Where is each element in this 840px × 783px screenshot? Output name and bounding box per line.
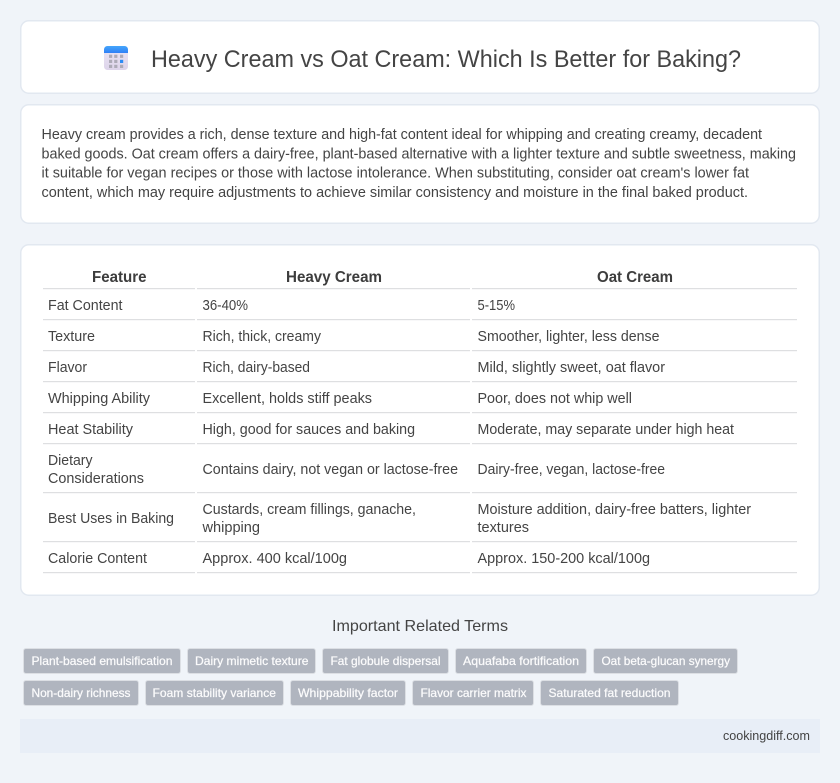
tag — [594, 648, 738, 674]
row: dietary considerations: Considerations — [48, 471, 144, 487]
tag — [540, 680, 678, 706]
row: calorie content — [48, 551, 650, 567]
row: texture — [48, 329, 660, 345]
intro text block: Heavy cream provides a rich, dense texture and high-fat content ideal for whipping and creating creamy, decadent — [42, 127, 762, 143]
row: dietary considerations: Dietary — [48, 453, 93, 469]
tag: Saturated fat reduction — [548, 686, 670, 700]
row: flavor: Mild, slightly sweet, oat flavor — [478, 360, 665, 376]
row: calorie content: Approx. 400 kcal/100g — [202, 551, 347, 567]
row: flavor: Rich, dairy-based — [202, 360, 310, 376]
tag — [188, 648, 316, 674]
row: dietary considerations — [48, 453, 665, 487]
panel: introduction — [21, 105, 819, 223]
tag: Plant-based emulsification — [32, 654, 172, 668]
footer site name: cookingdiff.com — [723, 729, 810, 743]
row: fat content: 36-40% — [202, 298, 248, 314]
tag — [290, 680, 406, 706]
table header row: Feature — [92, 269, 147, 286]
row: texture: Texture — [48, 329, 95, 345]
tag — [456, 648, 586, 674]
intro text block: baked goods. Oat cream offers a dairy-free, plant-based alternative with a lighter texture and subtle sweetness, making — [42, 146, 796, 162]
table header row — [92, 269, 673, 286]
row: texture: Smoother, lighter, less dense — [478, 329, 660, 345]
row: fat content: Fat Content — [48, 298, 122, 314]
row: flavor: Flavor — [48, 360, 87, 376]
tag: Non-dairy richness — [32, 686, 130, 700]
tag: Foam stability variance — [152, 686, 276, 700]
row: whipping ability: Whipping Ability — [48, 391, 151, 407]
row: best uses in baking: whipping — [201, 520, 260, 536]
tag: Fat globule dispersal — [330, 654, 440, 668]
row: whipping ability: Poor, does not whip well — [478, 391, 632, 407]
tag: Whippability factor — [298, 686, 398, 700]
row: flavor — [48, 360, 665, 376]
tag: Dairy mimetic texture — [195, 654, 309, 668]
row: best uses in baking: textures — [478, 520, 529, 536]
tag: Flavor carrier matrix — [420, 686, 526, 700]
row: dietary considerations: Contains dairy, not vegan or lactose-free — [202, 462, 458, 478]
header panel — [21, 21, 819, 93]
row: heat stability: Heat Stability — [48, 422, 134, 438]
row: heat stability — [48, 422, 734, 438]
row: dietary considerations: Dairy-free, vegan, lactose-free — [478, 462, 665, 478]
row: best uses in baking: Best Uses in Baking — [48, 511, 174, 527]
icon: calendar — [104, 46, 128, 70]
footer bar — [20, 719, 820, 753]
tag: Aquafaba fortification — [463, 654, 579, 668]
tag — [24, 680, 138, 706]
row: heat stability: High, good for sauces and baking — [202, 422, 415, 438]
row: whipping ability — [48, 391, 632, 407]
tag: Oat beta-glucan synergy — [602, 654, 730, 668]
tag — [322, 648, 448, 674]
row: best uses in baking — [48, 502, 751, 536]
row: texture: Rich, thick, creamy — [202, 329, 322, 345]
tag — [412, 680, 534, 706]
table header row: Heavy Cream — [286, 269, 382, 286]
row: heat stability: Moderate, may separate under high heat — [478, 422, 734, 438]
panel: comparison table — [21, 245, 819, 595]
tag — [146, 680, 284, 706]
row: fat content — [48, 298, 515, 314]
heading: important related terms: Important Related Terms — [332, 618, 508, 635]
related terms tags — [24, 648, 738, 706]
intro text block — [42, 127, 796, 201]
row: best uses in baking: Custards, cream fillings, ganache, — [202, 502, 416, 518]
row: calorie content: Calorie Content — [48, 551, 147, 567]
intro text block: it suitable for vegan recipes or those with lactose intolerance. When substituting, consider oat cream's lower fat — [42, 166, 749, 182]
intro text block: content, which may require adjustments to achieve similar consistency and moisture in the final baked product. — [42, 185, 748, 201]
row: whipping ability: Excellent, holds stiff peaks — [202, 391, 372, 407]
table header row: Oat Cream — [597, 269, 673, 286]
tag — [24, 648, 180, 674]
title: Heavy Cream vs Oat Cream: Which Is Better for Baking? — [151, 46, 741, 73]
row: calorie content: Approx. 150-200 kcal/100g — [478, 551, 650, 567]
row: best uses in baking: Moisture addition, dairy-free batters, lighter — [478, 502, 751, 518]
row: fat content: 5-15% — [478, 298, 515, 314]
